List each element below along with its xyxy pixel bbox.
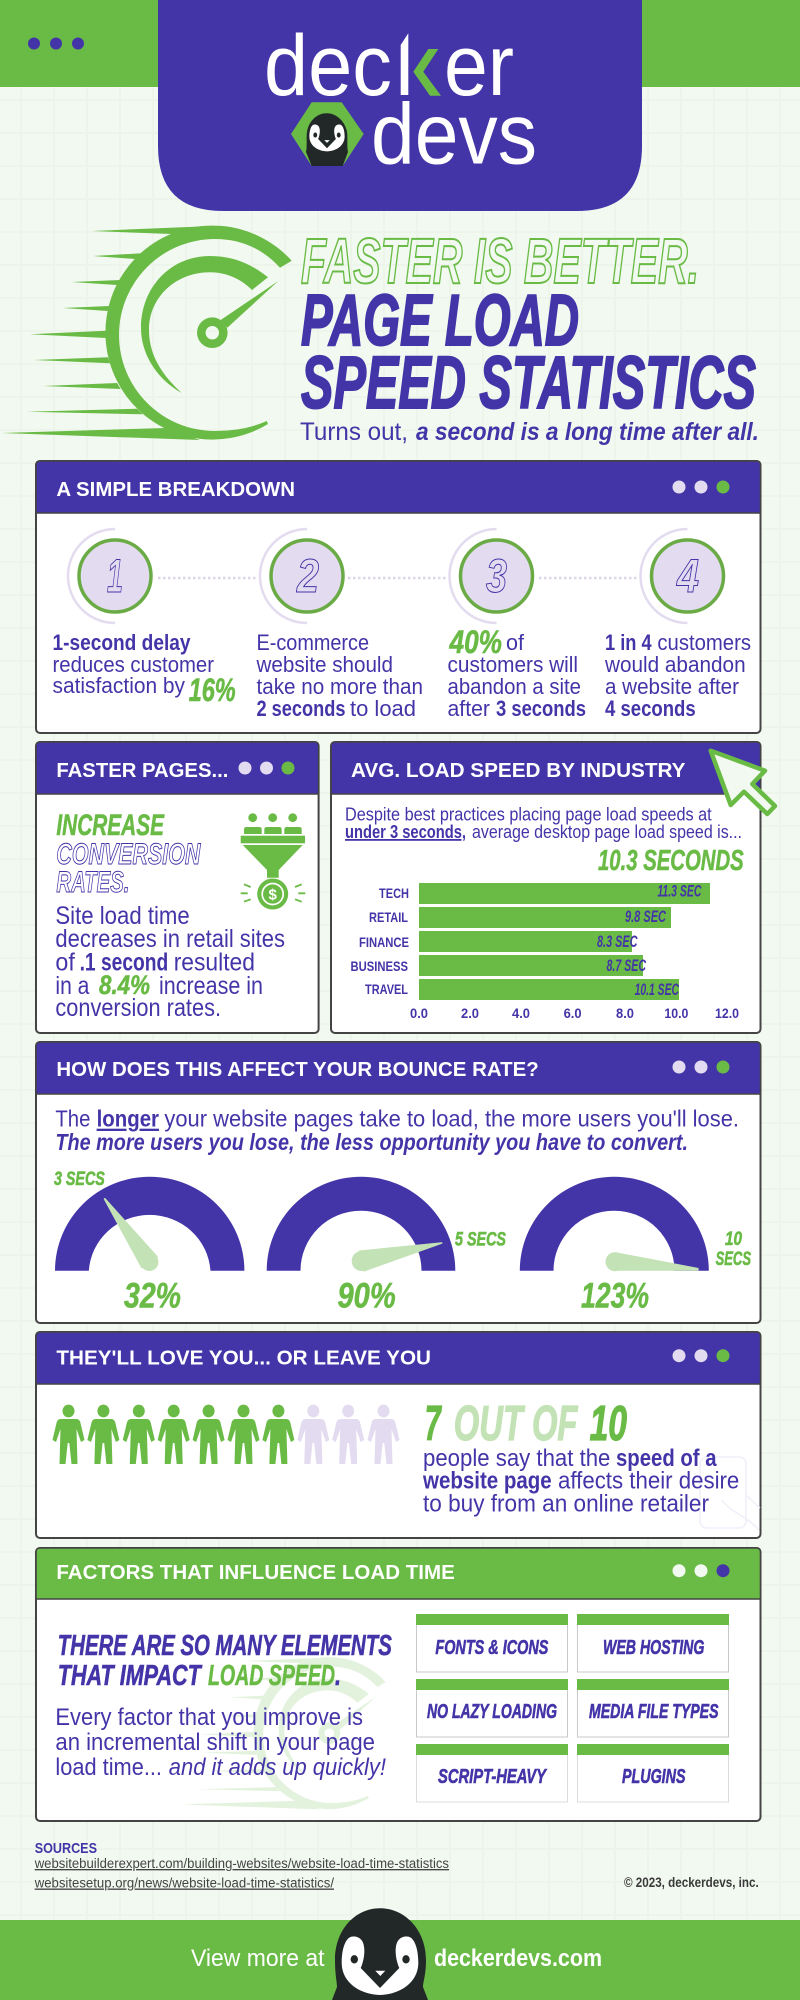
factor: script-heavy xyxy=(416,1744,568,1802)
heading: FACTORS THAT INFLUENCE LOAD TIME xyxy=(56,1562,455,1584)
factor: web hosting: WEB HOSTING xyxy=(603,1637,704,1659)
bar chart: 4.0 xyxy=(512,1005,530,1021)
big stat: 7 xyxy=(425,1397,442,1451)
step 2 badge: 2 xyxy=(296,549,319,602)
body text xyxy=(55,1704,386,1781)
pictogram: 7 of 10 people xyxy=(52,1405,400,1464)
intro text: under 3 seconds, xyxy=(345,822,466,842)
call to action: View more at xyxy=(191,1945,325,1972)
footer band xyxy=(0,1908,800,2000)
step 3 text: customers will xyxy=(448,652,578,677)
call to action xyxy=(191,1945,602,1972)
factor: web hosting xyxy=(577,1614,729,1672)
body text: Every factor that you improve is xyxy=(55,1704,363,1731)
subheading: . xyxy=(335,1660,341,1692)
heading: THEY'LL LOVE YOU... OR LEAVE YOU xyxy=(56,1347,431,1369)
step 2 badge xyxy=(260,529,343,623)
subheading: INCREASE xyxy=(56,809,165,842)
body text: resulted xyxy=(174,949,255,977)
step 2 text: E-commerce xyxy=(256,630,369,655)
panel: avg load speed by industry xyxy=(331,742,760,1033)
big stat: 10.3 SECONDS xyxy=(598,845,744,877)
gauge: 10 secs: 10 xyxy=(725,1229,742,1250)
bar chart xyxy=(350,882,739,1021)
body text: decreases in retail sites xyxy=(55,925,285,953)
intro text: your website pages take to load, the more users you'll lose. xyxy=(164,1106,739,1132)
step 4 text: a website after xyxy=(605,674,739,699)
sources: SOURCES xyxy=(35,1840,97,1857)
gauge: 3 secs: 3 SECS xyxy=(54,1169,105,1190)
body text: people say that the xyxy=(423,1445,610,1472)
bar chart: 11.3 SEC xyxy=(657,882,702,901)
big stat: OUT OF xyxy=(454,1397,578,1451)
heading: HOW DOES THIS AFFECT YOUR BOUNCE RATE? xyxy=(56,1059,539,1081)
gauge: 5 secs: 90% xyxy=(338,1277,396,1316)
factor: plugins xyxy=(577,1744,729,1802)
subheading: LOAD SPEED xyxy=(208,1660,335,1692)
factor: plugins: PLUGINS xyxy=(622,1766,686,1788)
factor: fonts and icons xyxy=(416,1614,568,1672)
bar chart: 10.0 xyxy=(664,1005,689,1021)
heading: A SIMPLE BREAKDOWN xyxy=(56,479,295,501)
factor: script-heavy: SCRIPT-HEAVY xyxy=(438,1766,547,1788)
heading: FASTER PAGES... xyxy=(56,760,228,782)
step 4 text: would abandon xyxy=(604,652,746,677)
step 3 badge xyxy=(449,529,532,623)
body text: an incremental shift in your page xyxy=(55,1729,375,1756)
icon: funnel with coin: $ xyxy=(269,886,278,904)
gauge: 3 secs: 32% xyxy=(124,1277,181,1316)
panel: factors xyxy=(36,1548,760,1821)
bar chart: BUSINESS xyxy=(350,958,408,974)
intro text: longer xyxy=(97,1106,159,1132)
body text: in a xyxy=(55,972,89,1000)
step 1 text: 16% xyxy=(189,672,236,708)
logo xyxy=(264,18,537,182)
call to action: deckerdevs.com xyxy=(434,1945,602,1972)
step 1 text: 1-second delay xyxy=(52,630,191,655)
intro text: The xyxy=(55,1106,90,1132)
subheading: THERE ARE SO MANY ELEMENTS xyxy=(58,1630,392,1662)
factor: no lazy loading xyxy=(416,1679,568,1737)
big stat: 10 xyxy=(590,1397,627,1451)
subheading xyxy=(56,809,201,899)
window dots xyxy=(672,1564,730,1577)
body text: Site load time xyxy=(55,902,190,930)
panel: a simple breakdown xyxy=(36,461,760,733)
intro text: The more users you lose, the less opportunity you have to convert. xyxy=(55,1129,688,1155)
window dots xyxy=(672,1060,730,1074)
body text: speed of a xyxy=(616,1445,717,1472)
factor: fonts and icons: FONTS & ICONS xyxy=(435,1637,549,1659)
sources: websitesetup.org/news/website-load-time-statistics/ xyxy=(34,1876,334,1890)
body text: website page xyxy=(422,1467,552,1494)
panel: bounce rate xyxy=(36,1042,760,1323)
step 3 text: of xyxy=(506,630,525,655)
factor: media file types xyxy=(577,1679,729,1737)
bar chart: 10.1 SEC xyxy=(635,980,679,999)
icon: funnel with coin xyxy=(241,813,305,910)
icon: penguin xyxy=(332,1908,428,2000)
title xyxy=(300,225,759,446)
intro text xyxy=(345,805,742,842)
gauge: 5 secs xyxy=(267,1177,506,1316)
bar chart: 6.0 xyxy=(564,1005,582,1021)
bar chart: TRAVEL xyxy=(365,981,408,997)
copyright: © 2023, deckerdevs, inc. xyxy=(624,1875,759,1890)
title: PAGE LOAD xyxy=(301,281,579,361)
body text: conversion rates. xyxy=(55,994,221,1022)
body text: affects their desire xyxy=(558,1467,739,1494)
step 3 text: 40% xyxy=(449,624,502,660)
bar chart: FINANCE xyxy=(359,934,409,950)
bar chart: 8.7 SEC xyxy=(606,956,646,975)
intro text xyxy=(55,1106,739,1155)
step 4 text: 4 seconds xyxy=(605,696,696,721)
icon: faint phone xyxy=(700,1457,760,1530)
logo: er xyxy=(444,18,514,114)
step 2 text: to load xyxy=(350,696,416,721)
factor: media file types: MEDIA FILE TYPES xyxy=(589,1701,719,1723)
icon: speedometer xyxy=(2,226,292,440)
window dots xyxy=(238,762,294,774)
title: a second is a long time after all. xyxy=(416,418,759,446)
gauge: 10 secs xyxy=(520,1177,751,1316)
gauge: 5 secs: 5 SECS xyxy=(455,1230,506,1251)
intro text: average desktop page load speed is... xyxy=(472,822,742,842)
step 1 badge: 1 xyxy=(107,549,123,602)
step 3 text: abandon a site xyxy=(448,674,581,699)
step 4 text: 1 in 4 xyxy=(605,630,652,655)
body text: load time... xyxy=(55,1754,162,1781)
header band xyxy=(0,0,800,211)
step 1 text: reduces customer xyxy=(52,652,214,677)
bar chart: 8.0 xyxy=(616,1005,634,1021)
heading: AVG. LOAD SPEED BY INDUSTRY xyxy=(351,760,686,782)
step 4 badge xyxy=(640,529,724,623)
icon: mouse cursor xyxy=(711,751,775,814)
step 3 text: 3 seconds xyxy=(496,696,586,721)
panel: love you or leave you xyxy=(36,1332,760,1538)
bar chart: 2.0 xyxy=(461,1005,479,1021)
body text: 8.4% xyxy=(99,970,150,1000)
body text xyxy=(55,902,285,1022)
step 4 badge: 4 xyxy=(676,549,699,602)
step 4 text xyxy=(604,630,751,721)
step 3 badge: 3 xyxy=(486,549,507,602)
body text: to buy from an online retailer xyxy=(423,1491,709,1518)
subheading: CONVERSION xyxy=(56,838,201,871)
body text: and it adds up quickly! xyxy=(169,1754,386,1781)
step 1 text xyxy=(52,630,236,708)
bar chart: TECH xyxy=(379,885,409,901)
body text: .1 second xyxy=(80,949,168,977)
step 2 text: take no more than xyxy=(256,674,423,699)
bar chart: RETAIL xyxy=(369,909,408,925)
step 2 text: 2 seconds xyxy=(256,696,346,721)
step 4 text: customers xyxy=(657,630,751,655)
title: Turns out, xyxy=(300,418,408,446)
step 2 text xyxy=(256,630,423,721)
gauge: 3 secs xyxy=(54,1169,244,1316)
step 3 text: after xyxy=(448,696,490,721)
subheading xyxy=(58,1630,392,1692)
bar chart: 9.8 SEC xyxy=(625,907,666,926)
body text xyxy=(422,1445,739,1518)
gauge: 10 secs: 123% xyxy=(581,1277,649,1316)
subheading: RATES. xyxy=(56,866,129,899)
panel: faster pages xyxy=(36,742,319,1033)
body text: of xyxy=(55,949,75,977)
sources xyxy=(34,1840,449,1890)
bar chart: 12.0 xyxy=(715,1005,739,1021)
intro text: Despite best practices placing page load speeds at xyxy=(345,805,712,825)
logo: devs xyxy=(371,86,537,182)
watermark speedometer xyxy=(180,1657,386,1809)
subheading: THAT IMPACT xyxy=(58,1660,202,1692)
step 1 badge xyxy=(68,529,151,623)
sources: websitebuilderexpert.com/building-websites/website-load-time-statistics xyxy=(34,1856,449,1871)
window dots xyxy=(672,1349,730,1362)
gauge: 10 secs: SECS xyxy=(716,1249,751,1270)
body text: increase in xyxy=(159,972,263,1000)
logo: dec xyxy=(264,18,392,114)
bar chart: 0.0 xyxy=(410,1005,428,1021)
window dots xyxy=(672,480,730,494)
step 1 text: satisfaction by xyxy=(52,673,185,698)
factor: no lazy loading: NO LAZY LOADING xyxy=(427,1701,557,1723)
bar chart: 8.3 SEC xyxy=(597,932,638,951)
step 3 text xyxy=(448,624,586,721)
step 2 text: website should xyxy=(256,652,393,677)
